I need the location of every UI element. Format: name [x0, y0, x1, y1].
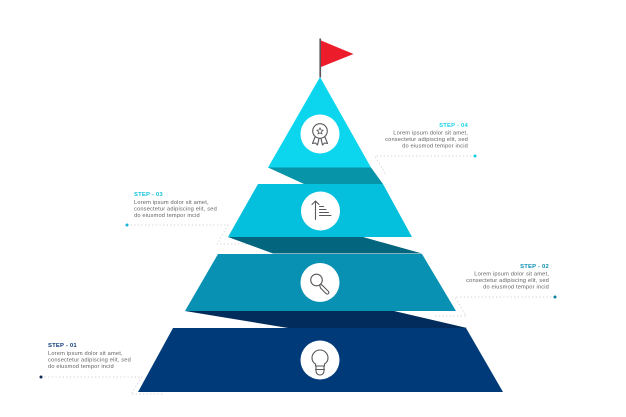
- dashed connector lines: [41, 156, 555, 394]
- icon: medal: [300, 114, 340, 154]
- step 04 marker: [474, 154, 476, 158]
- step 03 text: [134, 192, 217, 219]
- step 03 text: consectetur adipiscing elit, sed: [134, 206, 217, 212]
- step 04 text: [385, 123, 469, 150]
- step 01 text: do eiusmod tempor incid: [48, 364, 114, 370]
- step 02 marker: [554, 296, 556, 298]
- icon: light bulb: [300, 340, 340, 380]
- step 01 marker: [40, 376, 42, 378]
- pyramid tier 4: top triangle: [268, 77, 371, 168]
- icon: magnifying glass: [300, 263, 340, 302]
- flag: [319, 38, 354, 78]
- step 02 text: do eiusmod tempor incid: [483, 284, 549, 290]
- step 01 text: STEP - 01: [48, 343, 77, 349]
- step 03 marker: [126, 224, 128, 226]
- step 02 text: Lorem ipsum dolor sit amet,: [474, 272, 549, 278]
- step 04 text: Lorem ipsum dolor sit amet,: [393, 130, 468, 136]
- step 03 text: do eiusmod tempor incid: [134, 213, 200, 219]
- step 04 text: do eiusmod tempor incid: [402, 144, 468, 150]
- pyramid tier 1: base: [138, 311, 503, 392]
- step 02 text: STEP - 02: [520, 264, 550, 270]
- step 01 text: [48, 343, 131, 370]
- step 02 text: consectetur adipiscing elit, sed: [466, 278, 549, 284]
- step 02 text: [466, 264, 550, 290]
- pyramid tier 3: [228, 168, 412, 237]
- step 01 text: consectetur adipiscing elit, sed: [48, 358, 131, 364]
- step 04 text: STEP - 04: [439, 123, 469, 129]
- step 03 text: Lorem ipsum dolor sit amet,: [134, 200, 209, 206]
- step 01 text: Lorem ipsum dolor sit amet,: [48, 351, 123, 357]
- step 04 text: consectetur adipiscing elit, sed: [385, 137, 468, 143]
- step 03 text: STEP - 03: [134, 192, 163, 198]
- icon: ascending list arrow: [301, 192, 340, 230]
- pyramid tier 2: [185, 237, 456, 311]
